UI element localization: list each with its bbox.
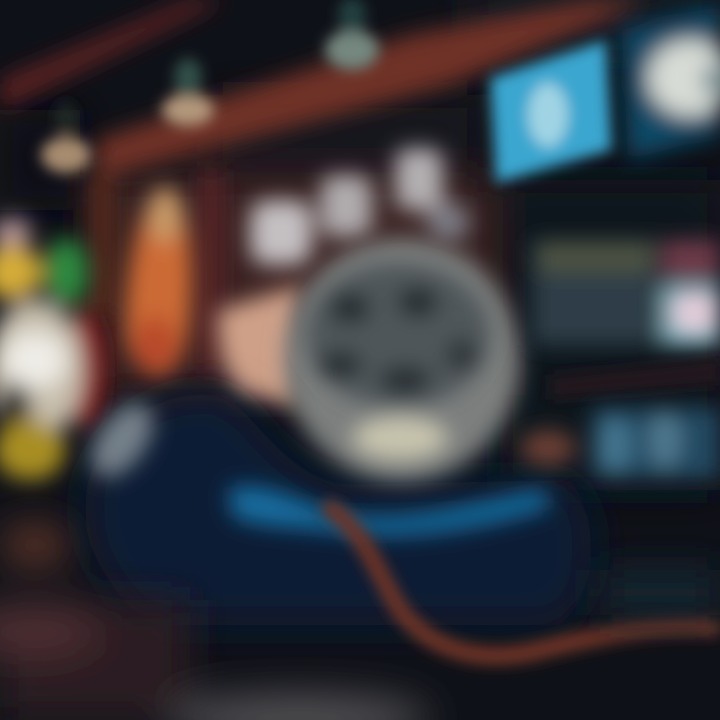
peach figure <box>217 285 300 405</box>
lower right blue items <box>520 408 720 478</box>
gray round character <box>284 238 520 482</box>
floor <box>0 525 720 720</box>
right shelf items <box>532 240 720 345</box>
hanging lamps <box>41 0 379 173</box>
toy on left <box>0 218 105 480</box>
teal screen with white circle <box>622 5 720 160</box>
light sleeve highlight <box>78 392 166 488</box>
character face <box>306 263 490 407</box>
red-brown cable <box>325 505 720 656</box>
ceiling beams <box>0 0 650 370</box>
blue screen <box>490 40 612 183</box>
dark shelf <box>550 358 720 400</box>
character ring <box>284 238 520 482</box>
dark blue body <box>85 394 591 625</box>
background wall <box>0 0 720 490</box>
orange lamp <box>125 187 192 378</box>
bright blue band <box>228 486 550 536</box>
white sign blobs <box>250 148 470 265</box>
character chin <box>352 416 448 460</box>
